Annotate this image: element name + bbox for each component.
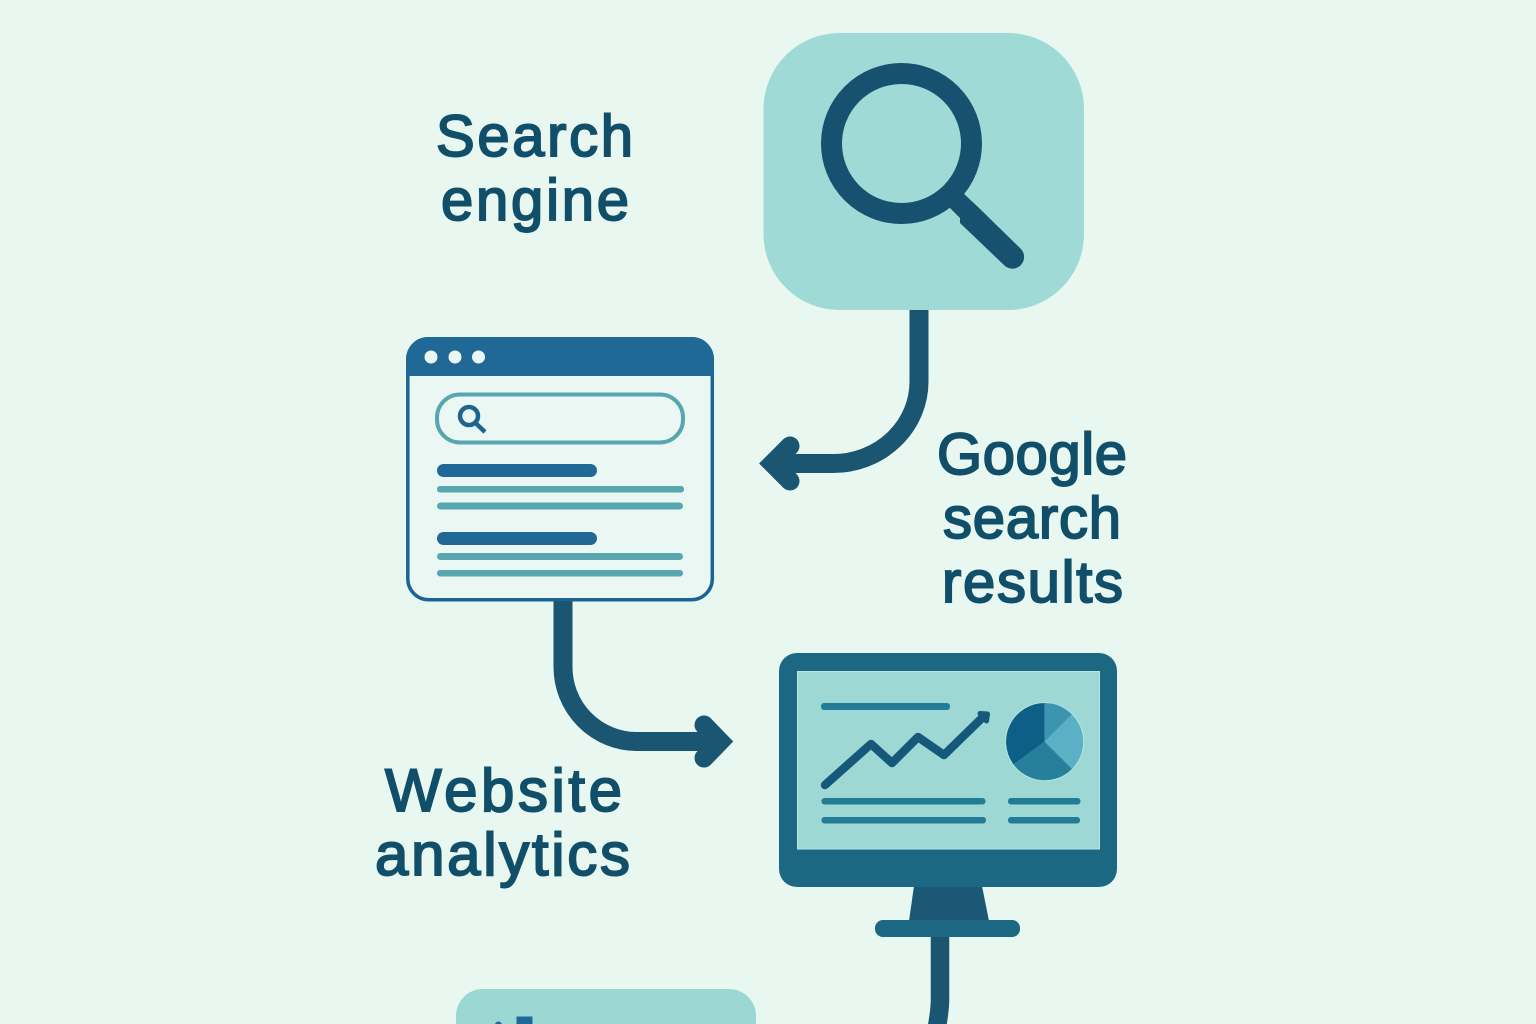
heading: Google search results: results — [942, 550, 1123, 615]
search bar — [437, 394, 683, 442]
panel: partially visible bottom tile — [456, 989, 756, 1024]
monitor stand base — [875, 920, 1020, 937]
screen header line — [821, 703, 950, 710]
arrow: results to analytics — [563, 601, 720, 758]
heading: Search engine: Search — [436, 104, 633, 169]
line chart with arrow — [825, 714, 988, 785]
search result 1 — [437, 464, 684, 510]
browser title bar — [406, 337, 714, 376]
monitor body — [779, 653, 1117, 887]
heading: Google search results: search — [943, 486, 1121, 551]
monitor stand neck — [909, 886, 989, 921]
panel: search engine tile — [764, 33, 1084, 310]
heading: Website analytics: analytics — [375, 821, 630, 888]
icon: bar chart fragment — [495, 1016, 532, 1024]
connector: monitor to next step — [936, 935, 940, 1024]
heading: Website analytics: Website — [385, 757, 622, 824]
icon: magnifying glass — [832, 74, 1024, 269]
pie chart — [1005, 702, 1084, 781]
heading: Google search results: Google — [937, 422, 1127, 487]
heading: Search engine: engine — [441, 168, 629, 233]
heading: Google search results — [937, 422, 1127, 615]
heading: Search engine — [436, 104, 633, 233]
search result 2 — [437, 532, 683, 576]
heading: Website analytics — [375, 757, 630, 888]
icon: small magnifying glass — [460, 407, 485, 432]
window control dots — [424, 350, 485, 364]
monitor screen — [798, 672, 1100, 849]
panel: analytics monitor — [779, 653, 1117, 937]
screen text lines — [822, 798, 1080, 824]
arrow: search engine to results — [772, 310, 919, 481]
panel: browser window with search results — [406, 337, 714, 600]
